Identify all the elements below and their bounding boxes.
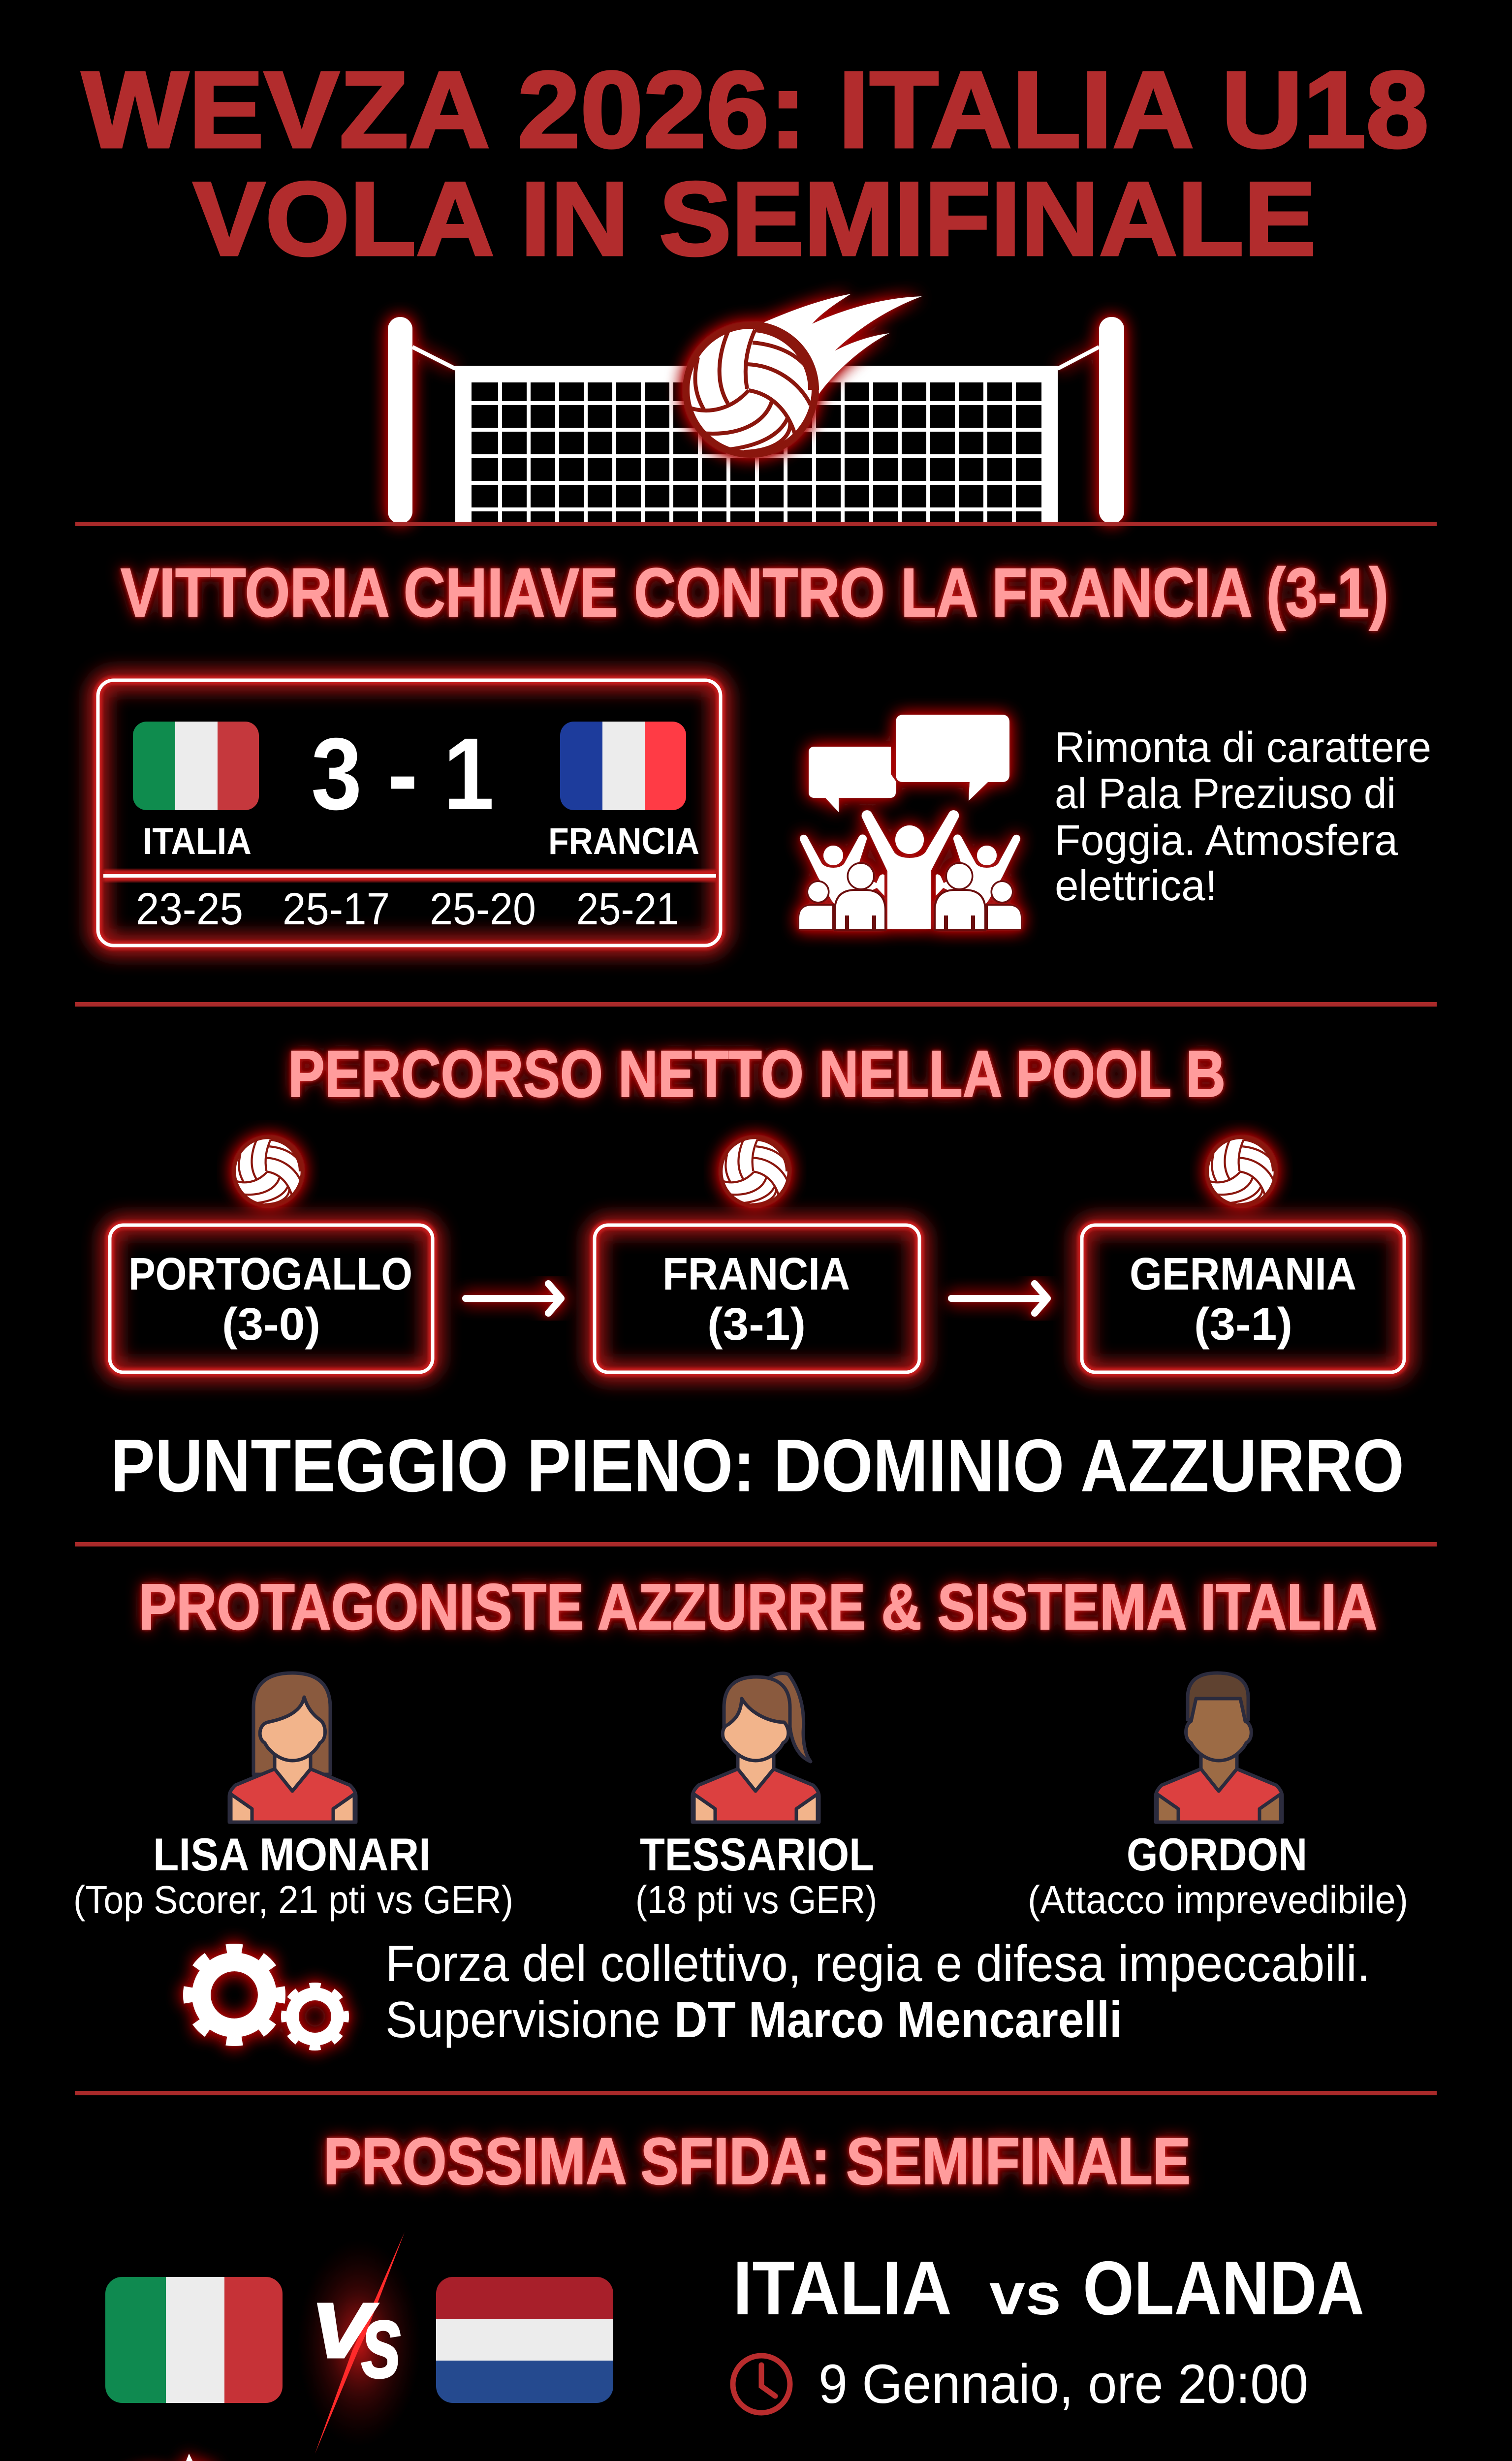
panel: match score <box>98 680 721 946</box>
icon: ball 3 <box>1207 1137 1275 1205</box>
player: Tessariol <box>635 1673 877 1922</box>
player: Lisa Monari: (Top Scorer, 21 pti vs GER) <box>73 1878 513 1922</box>
text: collettivo: Forza del collettivo, regia e difesa impeccabili. <box>385 1935 1370 1992</box>
text: rimonta: al Pala Preziuso di <box>1055 770 1396 818</box>
icon: player with short hair <box>1156 1673 1282 1822</box>
icon: gears <box>188 1949 346 2047</box>
text: collettivo: DT Marco Mencarelli <box>674 1991 1122 2049</box>
title: VOLA IN SEMIFINALE <box>193 160 1316 278</box>
flag: Netherlands <box>436 2277 613 2403</box>
icon: player with ponytail <box>693 1673 819 1822</box>
icon: versus: V <box>311 2288 378 2374</box>
match title: OLANDA <box>1083 2245 1364 2331</box>
arrow 2 <box>951 1284 1047 1313</box>
panel: Portogallo <box>110 1225 433 1372</box>
set scores <box>136 884 679 934</box>
set scores: 23-25 <box>136 884 243 934</box>
match date: 9 Gennaio, ore 20:00 <box>819 2353 1308 2415</box>
panel: Portogallo: (3-0) <box>222 1298 320 1350</box>
panel: Germania: GERMANIA <box>1130 1248 1356 1299</box>
text: collettivo: Supervisione <box>385 1991 661 2049</box>
icon: versus <box>298 2232 421 2454</box>
arrow 1 <box>466 1284 561 1313</box>
text: collettivo <box>385 1935 1370 2049</box>
text: rimonta: Foggia. Atmosfera <box>1055 817 1398 864</box>
set scores: 25-17 <box>283 884 390 934</box>
icon: target <box>100 2454 217 2461</box>
player: Tessariol: (18 pti vs GER) <box>635 1878 877 1922</box>
icon: ball 2 <box>721 1137 789 1205</box>
player: Lisa Monari <box>73 1673 513 1922</box>
icon: cheering crowd <box>799 715 1021 929</box>
panel: Francia <box>595 1225 919 1372</box>
title <box>82 49 1429 278</box>
set scores: 25-20 <box>430 884 536 934</box>
match title: ITALIA <box>733 2245 952 2331</box>
score: 3 - 1 <box>311 717 494 831</box>
player: Gordon: (Attacco imprevedibile) <box>1028 1878 1408 1922</box>
icon: volleyball net <box>388 317 1124 524</box>
icon: ball 1 <box>234 1137 302 1205</box>
icon: clock <box>733 2356 790 2413</box>
icon: player with long hair <box>229 1673 356 1822</box>
set scores: 25-21 <box>576 884 679 934</box>
match title: vs <box>989 2261 1061 2327</box>
title: WEVZA 2026: ITALIA U18 <box>82 49 1429 170</box>
flag: Italy <box>133 722 259 810</box>
panel: Francia: (3-1) <box>707 1298 806 1350</box>
flag: Italy large <box>105 2277 283 2403</box>
heading: percorso netto: PERCORSO NETTO NELLA POOL B <box>288 1038 1226 1111</box>
heading: prossima sfida: PROSSIMA SFIDA: SEMIFINALE <box>323 2125 1191 2198</box>
panel: Francia: FRANCIA <box>662 1248 850 1299</box>
player: Tessariol: TESSARIOL <box>640 1829 874 1880</box>
panel: Germania <box>1082 1225 1404 1372</box>
icon: versus: s <box>361 2281 403 2400</box>
player: Lisa Monari: LISA MONARI <box>153 1829 431 1880</box>
player: Gordon: GORDON <box>1127 1829 1307 1880</box>
text: rimonta <box>1055 724 1431 910</box>
text: rimonta: Rimonta di carattere <box>1055 724 1431 771</box>
icon: flying volleyball <box>686 294 922 454</box>
flag: France <box>560 722 686 810</box>
text: rimonta: elettrica! <box>1055 862 1217 910</box>
team: Francia: FRANCIA <box>548 820 699 862</box>
team: Italia: ITALIA <box>143 820 252 862</box>
match title <box>733 2245 1364 2331</box>
panel: Germania: (3-1) <box>1194 1298 1292 1350</box>
panel: Portogallo: PORTOGALLO <box>128 1248 412 1299</box>
player: Gordon <box>1028 1673 1408 1922</box>
